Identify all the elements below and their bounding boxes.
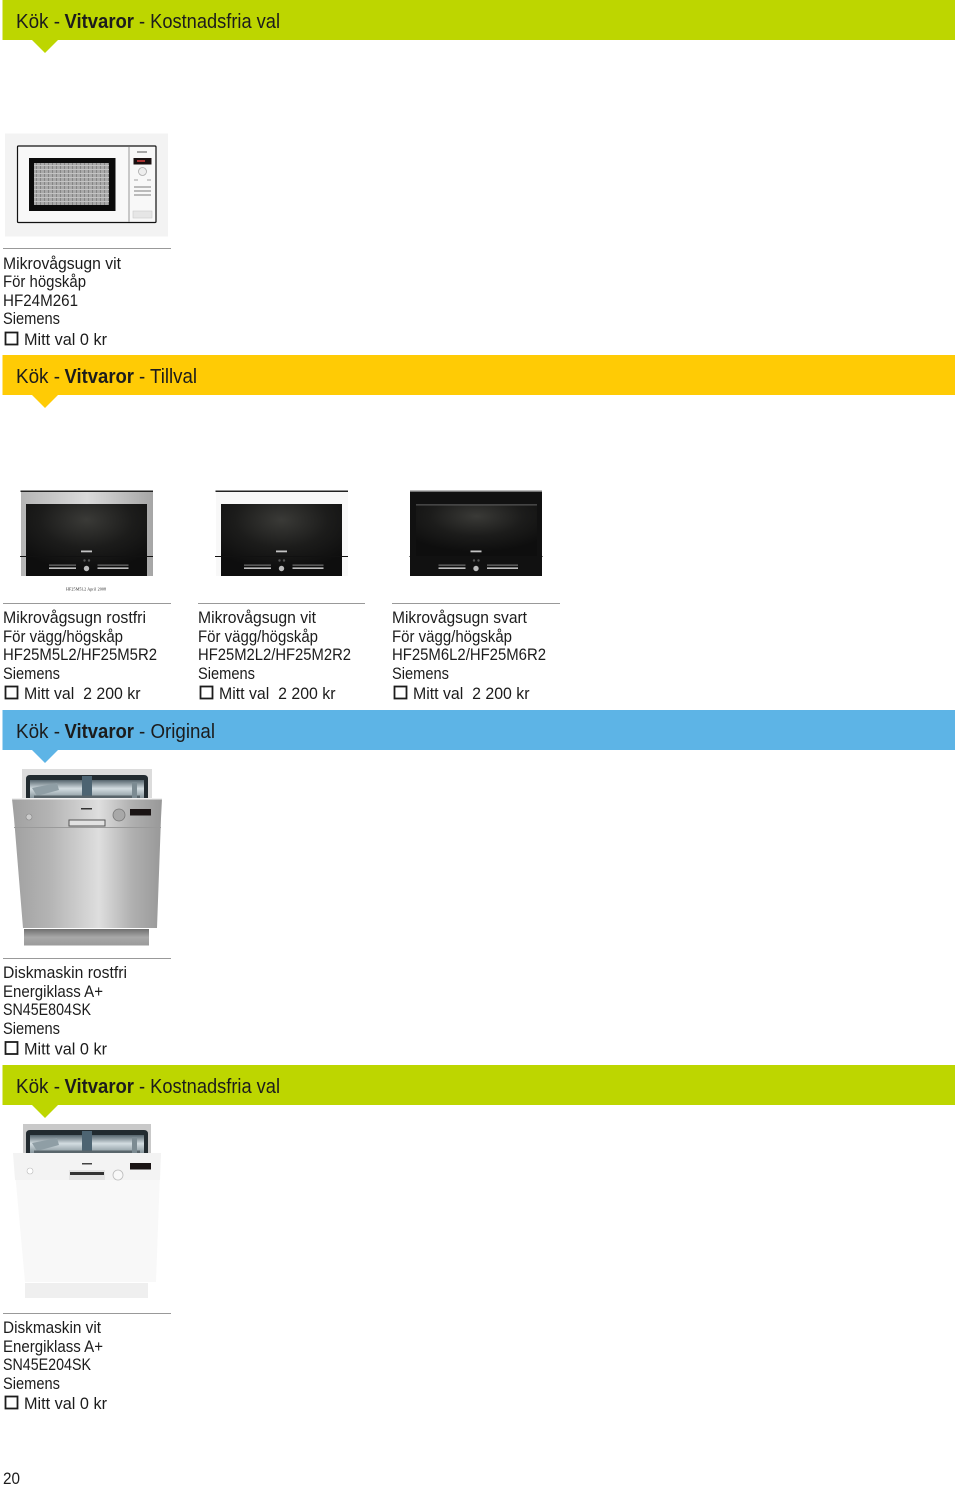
divider and product text: Mikrovågsugn rostfri: Siemens (3, 665, 60, 683)
divider and product text: Mikrovågsugn rostfri: HF25M5L2/HF25M5R2 (3, 646, 157, 664)
divider and product text: Diskmaskin vit: Mitt val 0 kr (24, 1395, 107, 1413)
divider and product text: Mikrovågsugn vit: För vägg/högskåp (198, 628, 318, 646)
divider and product text: Diskmaskin rostfri: Energiklass A+ (3, 983, 103, 1001)
divider and product text: Mikrovågsugn vit (198, 603, 365, 703)
divider and product text: Mikrovågsugn svart: Siemens (392, 665, 449, 683)
divider and product text: Mikrovågsugn vit: För högskåp (3, 273, 86, 291)
divider and product text: Mikrovågsugn rostfri: Mikrovågsugn rostfri (3, 609, 146, 627)
header: Kök - Vitvaror - Kostnadsfria val: Vitvaror (64, 11, 134, 33)
header: Kök - Vitvaror - Original: Vitvaror (64, 721, 134, 743)
header: Kök - Vitvaror - Original (2, 710, 955, 763)
divider and product text: Mikrovågsugn vit: Mikrovågsugn vit (198, 609, 316, 627)
divider and product text: Diskmaskin vit (3, 1313, 171, 1413)
divider and product text: Mikrovågsugn svart: För vägg/högskåp (392, 628, 512, 646)
header: Kök - Vitvaror - Tillval: Kök - (16, 366, 60, 388)
header: Kök - Vitvaror - Tillval: - Tillval (139, 366, 197, 388)
product image: stainless microwave (20, 490, 153, 592)
header: Kök - Vitvaror - Kostnadsfria val: - Kostnadsfria val (139, 1076, 280, 1098)
divider and product text: Mikrovågsugn rostfri: Mitt val 2 200 kr (24, 685, 141, 703)
header: Kök - Vitvaror - Tillval (2, 355, 955, 408)
divider and product text: Mikrovågsugn svart: Mikrovågsugn svart (392, 609, 527, 627)
divider and product text: Mikrovågsugn svart: HF25M6L2/HF25M6R2 (392, 646, 546, 664)
divider and product text: Diskmaskin rostfri: Siemens (3, 1020, 60, 1038)
header: Kök - Vitvaror - Original: - Original (139, 721, 215, 743)
divider and product text: Diskmaskin rostfri: Mitt val 0 kr (24, 1040, 107, 1058)
header: Kök - Vitvaror - Original: Kök - (16, 721, 60, 743)
divider and product text: Mikrovågsugn svart (392, 603, 560, 703)
divider and product text: Mikrovågsugn vit: Siemens (198, 665, 255, 683)
header: Kök - Vitvaror - Kostnadsfria val: Kök - (16, 1076, 60, 1098)
header: Kök - Vitvaror - Kostnadsfria val: Kök - (16, 11, 60, 33)
header: Kök - Vitvaror - Kostnadsfria val (2, 0, 955, 53)
divider and product text: Mikrovågsugn vit: Mikrovågsugn vit (3, 255, 121, 273)
divider and product text: Mikrovågsugn vit: Mitt val 0 kr (24, 331, 107, 349)
product image: white wall microwave (215, 490, 348, 576)
product image: black wall microwave (410, 490, 542, 576)
header: Kök - Vitvaror - Tillval: Vitvaror (64, 366, 134, 388)
header: Kök - Vitvaror - Kostnadsfria val: Vitvaror (64, 1076, 134, 1098)
divider and product text: Mikrovågsugn vit: HF25M2L2/HF25M2R2 (198, 646, 351, 664)
divider and product text: Diskmaskin vit: SN45E204SK (3, 1356, 91, 1374)
header: Kök - Vitvaror - Kostnadsfria val: - Kostnadsfria val (139, 11, 280, 33)
product image: stainless dishwasher (12, 769, 162, 946)
divider and product text: Mikrovågsugn rostfri (3, 603, 171, 703)
header: Kök - Vitvaror - Kostnadsfria val (2, 1065, 955, 1118)
divider and product text: Diskmaskin vit: Siemens (3, 1375, 60, 1393)
divider and product text: Mikrovågsugn svart: Mitt val 2 200 kr (413, 685, 530, 703)
divider and product text: Diskmaskin rostfri: SN45E804SK (3, 1001, 91, 1019)
divider and product text: Diskmaskin rostfri: Diskmaskin rostfri (3, 964, 127, 982)
divider and product text: Diskmaskin vit: Diskmaskin vit (3, 1319, 101, 1337)
divider and product text: Mikrovågsugn vit (3, 248, 171, 349)
divider and product text: Diskmaskin vit: Energiklass A+ (3, 1338, 103, 1356)
divider and product text: Mikrovågsugn vit: HF24M261 (3, 292, 78, 310)
divider and product text: Mikrovågsugn rostfri: För vägg/högskåp (3, 628, 123, 646)
product image: white microwave (5, 134, 168, 236)
product image: white dishwasher (13, 1124, 161, 1298)
product image: stainless microwave: HF25M5L2 April 2008 (66, 586, 106, 592)
divider and product text: Mikrovågsugn vit: Mitt val 2 200 kr (219, 685, 336, 703)
divider and product text: Diskmaskin rostfri (3, 958, 171, 1058)
divider and product text: Mikrovågsugn vit: Siemens (3, 310, 60, 328)
